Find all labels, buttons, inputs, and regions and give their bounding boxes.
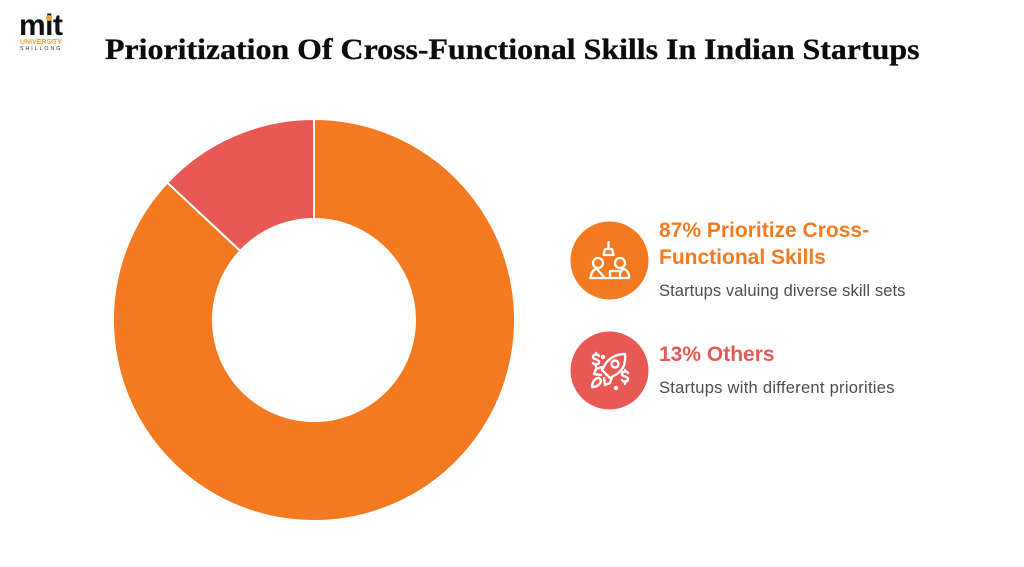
- title: Prioritization Of Cross-Functional Skills In Indian Startups: [105, 33, 920, 66]
- logo: MIT University Shillong: UNIVERSITY: [20, 38, 62, 46]
- description: Startups valuing diverse skill sets: [659, 282, 906, 300]
- legend item: 87%: [570, 219, 906, 300]
- logo: MIT University Shillong: SHILLONG: [20, 46, 62, 52]
- legend item: 13%: [570, 332, 895, 410]
- heading: 87% Prioritize Cross-Functional Skills: [659, 219, 869, 269]
- icon: team at desk: [570, 222, 648, 300]
- segment: 13% others: [167, 119, 314, 251]
- heading: 13% Others: 13% Others: [659, 343, 775, 366]
- segment: 87% prioritize cross-functional skills: [113, 119, 515, 521]
- icon: rocket with dollar signs: [570, 332, 648, 410]
- donut chart: [114, 120, 514, 520]
- description: Startups with different priorities: [659, 379, 895, 397]
- heading: 87% Prioritize Cross-Functional Skills: Functional Skills: [659, 246, 826, 269]
- heading: 87% Prioritize Cross-Functional Skills: 87% Prioritize Cross-: [659, 219, 869, 242]
- logo: MIT University Shillong: mit: [19, 9, 62, 42]
